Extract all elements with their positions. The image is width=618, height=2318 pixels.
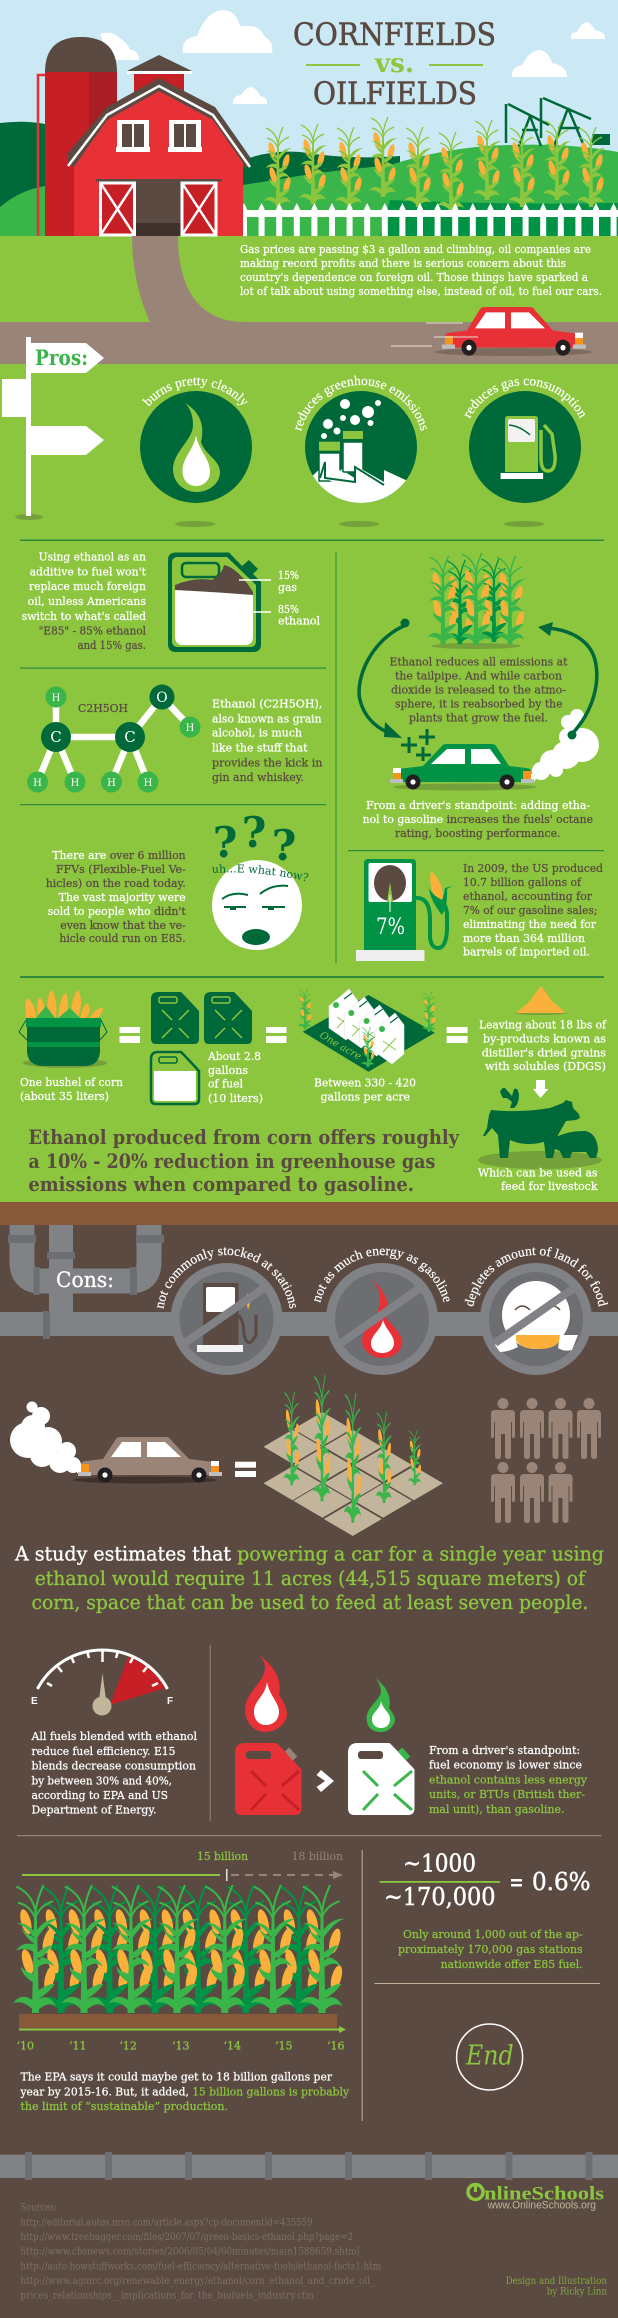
text: blended fuel efficiency: Department of Energy. <box>32 1803 156 1817</box>
text: ethanol reduces emissions <box>390 655 568 725</box>
text: fuel economy: fuel economy is lower since <box>429 1758 582 1772</box>
text: using ethanol additive: "E85" - 85% ethanol <box>39 624 146 638</box>
text: blended fuel efficiency: blends decrease consumption <box>32 1759 197 1773</box>
brown car with exhaust <box>10 1402 222 1484</box>
production timeline chart: ‘16 <box>327 2040 344 2053</box>
sources: http://www.agmrc.org/renewable_energy/ethanol/corn_ethanol_and_crude_oil_ <box>20 2276 374 2287</box>
text: driver standpoint octane <box>363 798 593 840</box>
dividers <box>20 668 604 978</box>
title <box>293 17 496 112</box>
field of corn, eleven acres <box>264 1375 443 1536</box>
text: FFVs: There are over 6 million <box>52 848 186 862</box>
text: fuel economy <box>429 1743 587 1816</box>
molecule diagram: H <box>71 778 80 789</box>
jerry can: E85 mix <box>168 552 320 652</box>
corn row <box>264 117 605 212</box>
barn <box>68 55 250 236</box>
fraction: stations offering E85: 0.6% <box>532 1868 590 1896</box>
text: using ethanol additive: additive to fuel won't <box>30 564 146 578</box>
production timeline chart: 15 billion <box>197 1849 249 1863</box>
text: 2009 production: In 2009, the US produced <box>463 861 604 875</box>
text: 2009 production: 10.7 billion gallons of <box>463 875 582 889</box>
text: ethanol also known as grain alcohol: gin and whiskey. <box>212 770 304 784</box>
barn windows <box>116 120 202 152</box>
road <box>0 236 618 364</box>
headline: greenhouse reduction: Ethanol produced from corn offers roughly <box>28 1125 460 1149</box>
production timeline chart: ‘12 <box>119 2040 137 2053</box>
DDGS pile and text: by-products known as <box>483 1032 606 1046</box>
headline: study estimates: ethanol would require 11 acres (44,515 square meters) of <box>35 1566 586 1590</box>
icon: 7% pump <box>356 859 452 961</box>
text: using ethanol additive: replace much foreign <box>29 579 147 593</box>
pros signpost: Pros: <box>35 345 88 370</box>
molecule diagram: C <box>50 728 62 746</box>
fence <box>240 203 618 236</box>
icon: pump crossed out, not commonly stocked: not commonly stocked at stations <box>157 1247 296 1309</box>
jerry can: E85 mix: 15% <box>278 568 299 582</box>
text: blended fuel efficiency: by between 30% and 40%, <box>32 1773 172 1787</box>
text: ethanol also known as grain alcohol: also known as grain <box>212 711 322 725</box>
credit <box>506 2276 607 2298</box>
title: vs. <box>374 49 414 79</box>
icon: factory, reduces greenhouse emissions: reduces greenhouse emissions <box>295 376 427 432</box>
confused face: ? <box>213 818 237 867</box>
molecule diagram: H <box>33 778 42 789</box>
sources: http://editorial.autos.msn.com/article.aspx?cp-documentid=435559 <box>20 2217 312 2228</box>
text: driver standpoint octane: rating, boosting performance. <box>395 826 560 840</box>
production timeline chart: 18 billion <box>292 1849 344 1863</box>
text: using ethanol additive: oil, unless Americans <box>28 594 146 608</box>
basket of corn <box>19 990 124 1103</box>
fuel gauge: F <box>167 1696 173 1707</box>
text: 2009 production: ethanol, accounting for <box>463 889 592 903</box>
fraction: stations offering E85 <box>380 1850 590 1911</box>
one acre diagram: Between 330 - 420 <box>314 1076 416 1090</box>
jerry can: E85 mix: gas <box>278 580 297 594</box>
text: fuel economy: From a driver's standpoint: <box>429 1743 580 1757</box>
text: 2009 production: more than 364 million <box>463 931 586 945</box>
icon: fuel pump, reduces gas consumption: reduces gas consumption <box>464 378 585 419</box>
molecule diagram <box>27 684 200 792</box>
text: fuel economy: ethanol contains less energy <box>429 1772 587 1786</box>
production timeline chart: ‘13 <box>172 2040 190 2053</box>
molecule diagram: H <box>186 723 195 734</box>
headline: greenhouse reduction <box>28 1125 460 1196</box>
end badge: End <box>465 2041 514 2072</box>
text: blended fuel efficiency: All fuels blended with ethanol <box>31 1729 197 1743</box>
molecule diagram: H <box>107 778 116 789</box>
icon: flame crossed out, not as much energy: not as much energy as gasoline <box>314 1248 450 1303</box>
oil pumps <box>506 98 610 146</box>
molecule diagram: H <box>144 778 153 789</box>
intro text: making record profits and there is serious concern about this <box>240 256 566 270</box>
text: 2009 production: eliminating the need for <box>463 917 596 931</box>
text: FFVs: sold to people who didn't <box>48 904 186 918</box>
divider <box>362 1850 363 2121</box>
text: 2009 production: 7% of our gasoline sales; <box>463 903 598 917</box>
corn cluster <box>428 553 525 649</box>
fuel cans: gallons of fuel <box>151 992 263 1105</box>
icon: flame, burns pretty cleanly <box>140 377 252 527</box>
confused face: uh...E what now? <box>212 864 308 881</box>
text: EPA limit: The EPA says it could maybe get to 18 billion gallons per <box>20 2070 332 2084</box>
red flame and can vs green flame and can <box>235 1653 414 1815</box>
one acre diagram: gallons per acre <box>320 1090 410 1104</box>
text: FFVs <box>46 848 186 945</box>
sources <box>20 2203 381 2302</box>
text: 2009 production: barrels of imported oil. <box>463 945 590 959</box>
silo <box>38 37 117 236</box>
text: using ethanol additive: and 15% gas. <box>78 638 146 652</box>
jerry can: E85 mix: 85% <box>278 602 299 616</box>
molecule diagram: C <box>124 728 136 746</box>
text: ethanol also known as grain alcohol: Ethanol (C2H5OH), <box>212 697 322 711</box>
text: ethanol also known as grain alcohol <box>212 697 323 784</box>
text: ethanol reduces emissions: Ethanol reduces all emissions at <box>390 655 568 669</box>
text: using ethanol additive: Using ethanol as an <box>39 550 147 564</box>
logo: OnlineSchools: nlineSchools <box>484 2184 604 2205</box>
section background: cons earth <box>0 1225 618 2318</box>
end badge <box>457 2024 523 2090</box>
sources: http://www.cbsnews.com/stories/2006/05/04/60minutes/main1588659.shtml <box>20 2247 360 2258</box>
text: ethanol reduces emissions: plants that grow the fuel. <box>409 711 548 725</box>
text: ethanol also known as grain alcohol: like the stuff that <box>212 741 308 755</box>
text: fuel economy: mal unit), than gasoline. <box>429 1802 564 1816</box>
exhaust smoke of green car <box>528 709 599 782</box>
icon: flame, burns pretty cleanly: burns pretty cleanly <box>142 377 248 406</box>
DDGS pile and text: Leaving about 18 lbs of <box>479 1018 607 1032</box>
fuel gauge: E <box>31 1696 38 1707</box>
title: OILFIELDS <box>313 76 477 112</box>
livestock <box>478 1088 602 1193</box>
production timeline chart: ‘15 <box>275 2040 292 2053</box>
text: ethanol also known as grain alcohol: alcohol, is much <box>212 726 303 740</box>
divider <box>210 1645 211 1821</box>
text: driver standpoint octane: From a driver's standpoint: adding etha- <box>366 798 590 812</box>
text: 1,000 stations <box>398 1927 583 1971</box>
fuel cans: gallons of fuel: About 2.8 <box>207 1049 261 1063</box>
barn doors <box>96 179 222 236</box>
text: 1,000 stations: Only around 1,000 out of the ap- <box>403 1927 583 1941</box>
cycle arrows <box>359 618 597 740</box>
divider <box>336 552 337 963</box>
text: using ethanol additive <box>22 550 147 652</box>
text: FFVs: hicle could run on E85. <box>60 931 186 945</box>
text: ethanol reduces emissions: sphere, it is reabsorbed by the <box>395 697 563 711</box>
intro text: country's dependence on foreign oil. Those things have sparked a <box>240 270 588 284</box>
text: EPA limit: year by 2015-16. But, it added, 15 billion gallons is probably <box>20 2084 349 2098</box>
text: blended fuel efficiency: reduce fuel efficiency. E15 <box>32 1744 175 1758</box>
equals <box>266 1027 286 1043</box>
one acre diagram: One acre <box>317 1030 363 1063</box>
fuel gauge <box>31 1650 173 1716</box>
hills <box>0 122 618 236</box>
title: CORNFIELDS <box>293 17 496 53</box>
text: fuel economy: units, or BTUs (British ther- <box>429 1787 585 1801</box>
headline: greenhouse reduction: emissions when compared to gasoline. <box>28 1172 414 1196</box>
text: using ethanol additive: switch to what's called <box>22 609 147 623</box>
clouds <box>100 10 605 104</box>
divider <box>20 540 604 541</box>
text: ethanol reduces emissions: the tailpipe. And while carbon <box>395 669 563 683</box>
confused face: ? <box>242 808 266 857</box>
fuel cans: gallons of fuel: (10 liters) <box>208 1091 263 1105</box>
livestock: Which can be used as <box>478 1166 598 1180</box>
headline: study estimates <box>14 1542 604 1614</box>
green car <box>390 729 537 790</box>
seven people <box>491 1398 601 1523</box>
icon: factory, reduces greenhouse emissions <box>295 376 427 527</box>
molecule diagram: H <box>52 693 61 704</box>
headline: study estimates: corn, space that can be used to feed at least seven people. <box>32 1590 588 1614</box>
pipes with cons label <box>0 1225 618 1339</box>
divider <box>374 1983 600 1984</box>
sources: Sources: <box>20 2203 57 2214</box>
text: blended fuel efficiency: according to EPA and US <box>32 1788 168 1802</box>
section background: pros grass <box>0 236 618 1202</box>
sources: prices_relationships__implications_for_the_biofuels_industry.cfm <box>20 2291 314 2302</box>
equals <box>120 1027 140 1043</box>
text: driver standpoint octane: nol to gasoline increases the fuels' octane <box>363 812 593 826</box>
headline: greenhouse reduction: a 10% - 20% reduction in greenhouse gas <box>28 1149 435 1173</box>
molecule diagram: C2H5OH <box>78 701 128 715</box>
sources: http://www.treehugger.com/files/2007/07/green-basics-ethanol.php?page=2 <box>20 2232 353 2243</box>
text: EPA limit <box>20 2070 349 2113</box>
text: blended fuel efficiency <box>31 1729 197 1817</box>
icon: 7% pump: 7% <box>376 915 405 940</box>
logo: OnlineSchools: www.OnlineSchools.org <box>487 2200 596 2212</box>
text: 1,000 stations: proximately 170,000 gas stations <box>398 1942 583 1956</box>
molecule diagram: O <box>156 690 168 706</box>
text: FFVs: hicles) on the road today. <box>46 876 186 890</box>
confused face: ? <box>272 821 296 870</box>
equals <box>447 1027 468 1043</box>
one acre diagram <box>298 989 436 1104</box>
text: 2009 production <box>463 861 604 959</box>
section background: soil band <box>0 1202 618 1226</box>
icon: hungry face crossed out, depletes land for food <box>464 1247 608 1375</box>
fuel cans: gallons of fuel: gallons <box>208 1063 248 1077</box>
text: EPA limit: the limit of “sustainable” production. <box>20 2099 228 2113</box>
confused face <box>212 808 308 950</box>
headline: study estimates: A study estimates that powering a car for a single year using <box>14 1542 604 1566</box>
section background: sky <box>0 0 618 236</box>
equals <box>235 1462 256 1477</box>
DDGS pile and text: distiller's dried grains <box>482 1046 606 1060</box>
jerry can: E85 mix: ethanol <box>278 614 320 628</box>
intro text <box>240 242 602 298</box>
divider <box>17 1835 602 1836</box>
sources: http://auto.howstuffworks.com/fuel-efficiency/alternative-fuels/ethanol-facts1.htm <box>20 2261 381 2272</box>
text: ethanol also known as grain alcohol: provides the kick in <box>212 755 323 769</box>
basket of corn: One bushel of corn <box>20 1075 124 1089</box>
logo: OnlineSchools <box>468 2183 604 2212</box>
fraction: stations offering E85: ~170,000 <box>384 1883 496 1911</box>
DDGS pile and text <box>479 986 607 1098</box>
livestock: feed for livestock <box>501 1179 598 1193</box>
bottom pipe <box>0 2152 618 2180</box>
text: FFVs: The vast majority were <box>59 890 186 904</box>
basket of corn: (about 35 liters) <box>20 1089 109 1103</box>
icon: flame crossed out, not as much energy <box>314 1248 450 1375</box>
text: ethanol reduces emissions: dioxide is released to the atmo- <box>391 683 566 697</box>
production timeline chart: ‘10 <box>16 2040 34 2053</box>
text: FFVs: FFVs (Flexible-Fuel Ve- <box>56 862 186 876</box>
icon: fuel pump, reduces gas consumption <box>464 378 585 527</box>
fraction: stations offering E85: ~1000 <box>403 1850 476 1878</box>
fuel cans: gallons of fuel: of fuel <box>208 1077 243 1091</box>
icon: hungry face crossed out, depletes land for food: depletes amount of land for food <box>464 1247 608 1307</box>
production timeline chart: ‘14 <box>224 2040 241 2053</box>
DDGS pile and text: with solubles (DDGS) <box>485 1059 606 1073</box>
pros signpost <box>2 337 104 520</box>
icon: pump crossed out, not commonly stocked <box>157 1247 296 1375</box>
red car <box>391 307 592 356</box>
production timeline chart: ‘11 <box>69 2040 86 2053</box>
pipes with cons label: Cons: <box>56 1268 114 1292</box>
text: FFVs: even know that the ve- <box>60 918 186 932</box>
production timeline chart <box>13 1849 346 2053</box>
text: 1,000 stations: nationwide offer E85 fuel. <box>441 1957 583 1971</box>
credit: by Ricky Linn <box>547 2287 607 2298</box>
